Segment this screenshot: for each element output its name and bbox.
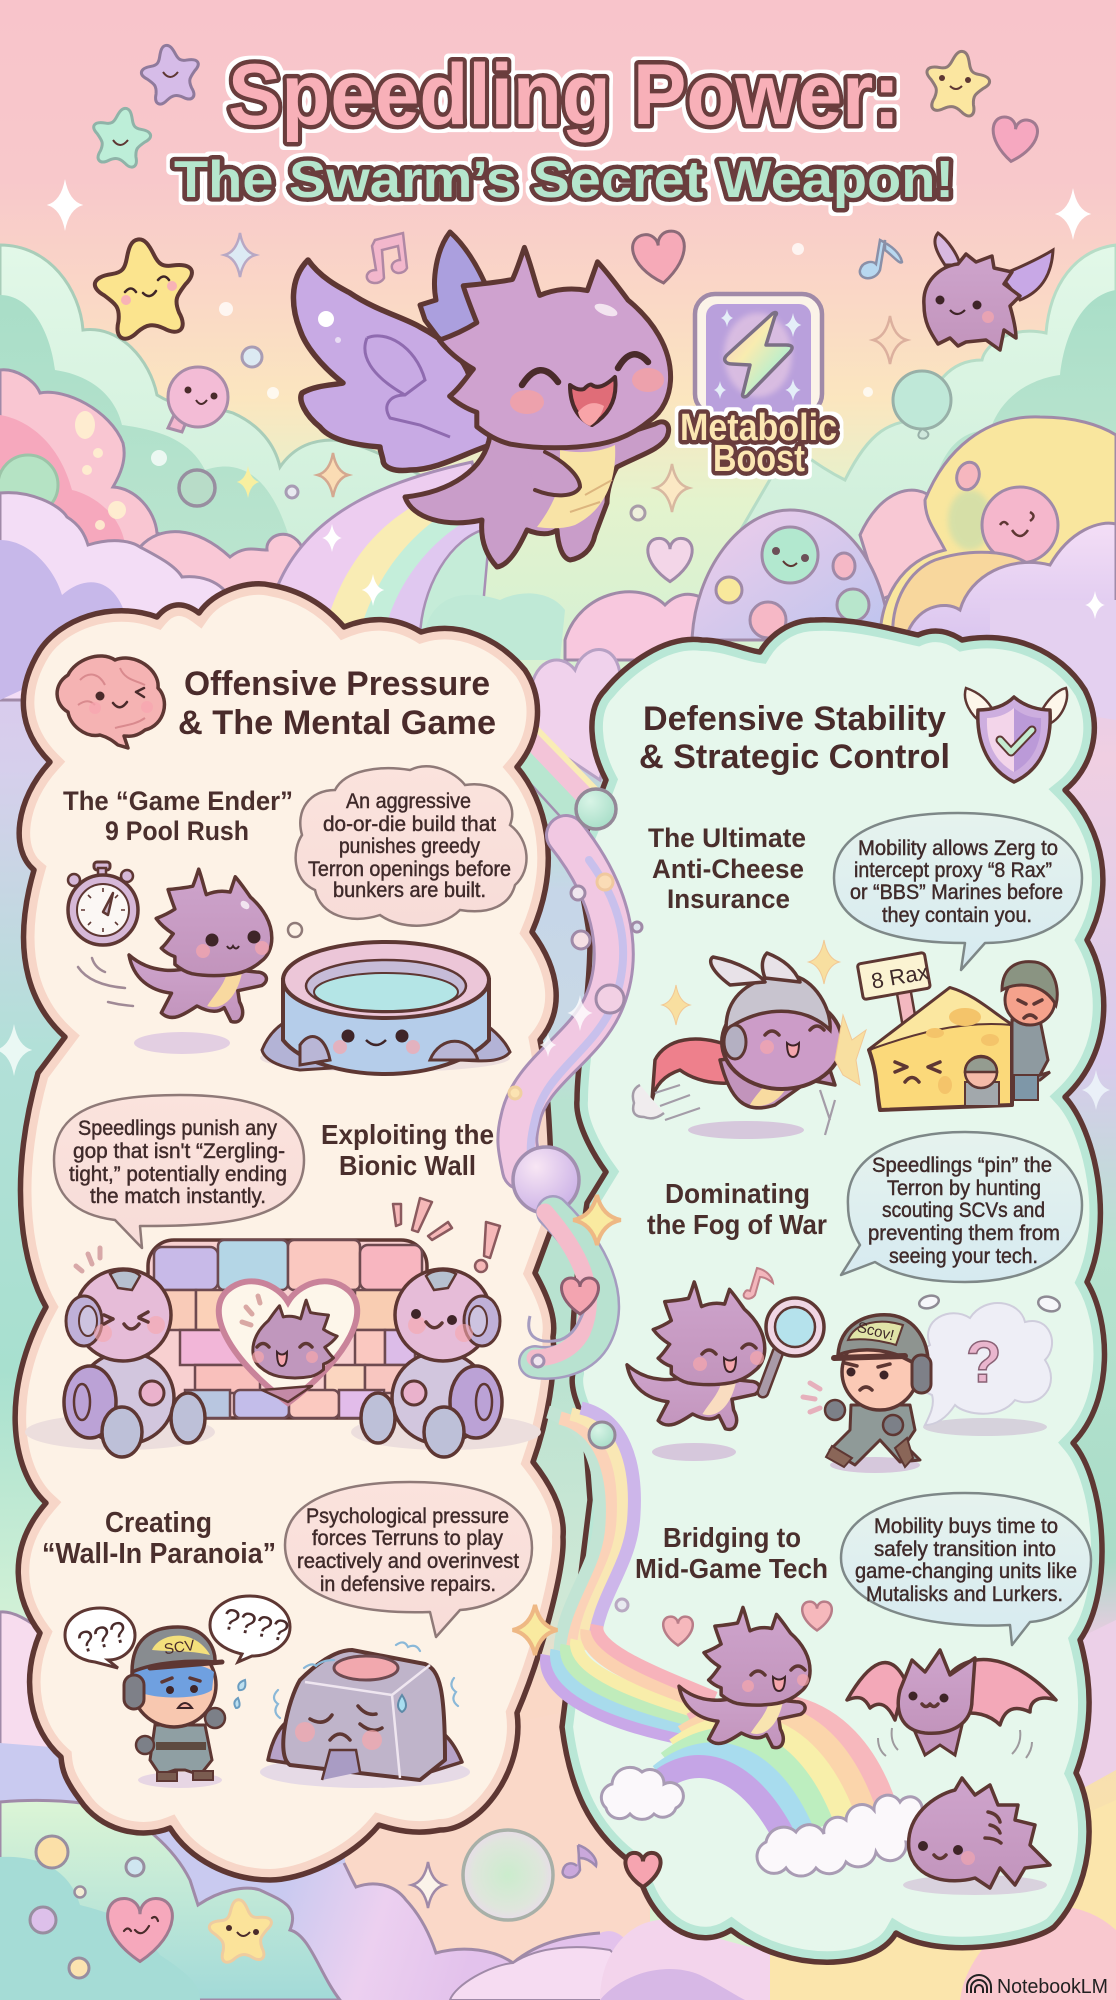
- icon: yellow star on ribbon: [573, 1195, 621, 1245]
- cloud: lavender right: [905, 523, 1116, 660]
- speech bubble: anti-cheese: they contain you.: [882, 904, 1032, 927]
- subheading: anti-cheese: Insurance: [667, 884, 790, 914]
- speech bubble: fog of war: scouting SCVs and: [882, 1199, 1045, 1222]
- cloud: right arch end: [757, 1795, 924, 1876]
- heart opening: [219, 1281, 357, 1403]
- marine robot right: [351, 1269, 541, 1457]
- icon: heart on panel edge: [625, 1853, 661, 1887]
- icon: pink heart top centre: [631, 229, 689, 287]
- heading: offensive pressure: Offensive Pressure: [184, 665, 490, 703]
- head: [439, 247, 671, 448]
- heading: defensive stability: & Strategic Control: [639, 738, 950, 776]
- speech bubble: fog of war: preventing them from: [868, 1222, 1060, 1245]
- speech bubble: anti-cheese: intercept proxy “8 Rax”: [854, 859, 1052, 882]
- subheading: 9 pool rush: The “Game Ender”: [63, 786, 293, 816]
- cloud: yellow bottom right: [770, 1800, 1116, 2000]
- label: metabolic boost: [680, 407, 837, 480]
- belly: [537, 445, 615, 528]
- decorative stars, hearts and sparkles: top: [47, 40, 1091, 582]
- motion lines: hero: [655, 1085, 835, 1135]
- cloud: pink base centre: [565, 592, 715, 660]
- cloud: pink inner: [0, 415, 125, 560]
- panel: offensive pressure: [15, 584, 563, 1880]
- mouth: [570, 377, 616, 425]
- cloud: mint bottom left: [0, 1800, 340, 2000]
- cloud: lavender inner: [0, 540, 130, 700]
- scv worried: [124, 1627, 225, 1788]
- icon: pink heart top right: [989, 116, 1039, 164]
- speedling: winged helmet hero: [652, 953, 842, 1139]
- sparkle right: [1055, 188, 1091, 240]
- subheading: wall-in paranoia: Creating: [105, 1507, 212, 1539]
- dust puff: [633, 1085, 664, 1118]
- background clouds: lower area: [0, 1612, 1116, 2000]
- speech bubble: bionic wall: gop that isn't “Zergling-: [73, 1140, 285, 1163]
- alert marks: [393, 1198, 500, 1272]
- speech bubble: anti-cheese: Mobility allows Zerg to: [858, 837, 1058, 860]
- small orbs on ribbon: [509, 874, 642, 1099]
- icon: mint blob face: [762, 527, 818, 583]
- cloud: pink right bottom: [960, 1905, 1116, 2000]
- title: [174, 47, 954, 209]
- hero speedling with wings: [293, 232, 671, 567]
- icon: big yellow star: [89, 233, 200, 342]
- bunker: [260, 1650, 470, 1788]
- cloud: bottom peach fill: [340, 1700, 660, 2000]
- speech bubble: bionic wall: [54, 1095, 304, 1248]
- fog thought cloud: [913, 1294, 1061, 1436]
- marine robot left: [25, 1269, 215, 1457]
- sign: 8 rax: [857, 952, 931, 1036]
- subheading: wall-in paranoia: “Wall-In Paranoia”: [42, 1538, 276, 1570]
- arm: [525, 450, 580, 495]
- icon: lavender star: [137, 40, 204, 106]
- speedling in heart: [252, 1300, 337, 1402]
- speech bubble: mid-game: game-changing units like: [855, 1560, 1077, 1583]
- cloud: teal right: [930, 290, 1116, 520]
- icon: notebook logo: [967, 1975, 991, 1993]
- speech bubble: paranoia: reactively and overinvest: [297, 1550, 519, 1573]
- spawning pool: [260, 942, 510, 1074]
- background: lower gutters: [0, 600, 1116, 2000]
- cloud: teal left: [0, 295, 300, 640]
- cheese wedge: [869, 988, 1012, 1110]
- panel: defensive stability: [562, 620, 1104, 1962]
- sparkle left: [47, 179, 83, 231]
- blush right: [632, 368, 664, 392]
- thought bubble: 9 pool: Terron openings before: [308, 858, 511, 881]
- ribbon: top band: [510, 718, 606, 822]
- small ring centre: [631, 506, 645, 520]
- thought bubble: 9 pool: An aggressive: [346, 790, 471, 813]
- icon: winged shield: [965, 688, 1067, 782]
- speech bubble: paranoia: forces Terruns to play: [312, 1527, 503, 1550]
- cloud: mint right: [700, 245, 1116, 640]
- orb: top mint: [576, 789, 616, 829]
- cloud: pink-lav bottom right: [600, 1920, 810, 2000]
- scv scowling: Scov!: [855, 1319, 896, 1344]
- brick wall with heart breach: [148, 1240, 427, 1418]
- eyes: [522, 354, 648, 385]
- icon: heart on ribbon: [561, 1278, 599, 1314]
- subheading: anti-cheese: The Ultimate: [648, 823, 806, 853]
- speech bubble: anti-cheese: [834, 813, 1082, 970]
- speech bubble: paranoia: in defensive repairs.: [320, 1573, 496, 1596]
- blush left: [510, 390, 544, 414]
- speech bubble: bionic wall: tight,” potentially ending: [69, 1163, 287, 1186]
- speech bubble: mid-game: [841, 1493, 1091, 1645]
- motion lines: dragon run: [78, 958, 133, 1006]
- subheading: mid-game tech: Bridging to: [663, 1522, 801, 1553]
- wing feather line: [365, 336, 450, 437]
- impact marks in heart: [242, 1296, 260, 1325]
- cloud: orange right: [893, 552, 1030, 640]
- cloud: mint band centre: [423, 593, 565, 660]
- motion marks: scv: [803, 1383, 820, 1412]
- subheading: anti-cheese: Anti-Cheese: [652, 854, 804, 884]
- outline sparkle: [412, 1862, 444, 1908]
- scv scowling: [825, 1315, 931, 1473]
- ring bubble: [242, 347, 262, 367]
- cloud: lavender pink bottom centre: [270, 1863, 700, 2000]
- yellow sparkle: [237, 466, 259, 498]
- note: [563, 1845, 596, 1878]
- sign: 8 rax: 8 Rax: [869, 959, 930, 994]
- sparkle left gutter: [0, 1024, 32, 1076]
- subheading: 9 pool rush: [63, 786, 293, 846]
- icon: stopwatch: [68, 862, 138, 945]
- speech bubble: mid-game: Mutalisks and Lurkers.: [866, 1583, 1063, 1606]
- icon: yellow star top right: [921, 46, 994, 119]
- heading: offensive pressure: [178, 665, 496, 742]
- cloud: lavender right gutter: [1075, 1620, 1116, 1790]
- icon: music note: [744, 1268, 773, 1299]
- speech bubble: fog of war: seeing your tech.: [889, 1245, 1038, 1268]
- icon: blue music note: [860, 240, 902, 278]
- speech bubble: mid-game: Mobility buys time to: [874, 1515, 1058, 1538]
- shine on head: [593, 301, 619, 319]
- small marine in cheese: [965, 1056, 999, 1106]
- motion lines: mutalisk: [878, 1728, 1032, 1758]
- subheading: wall-in paranoia: [42, 1507, 276, 1570]
- shake lines: [274, 1642, 458, 1718]
- brand: NotebookLM: NotebookLM: [997, 1976, 1108, 1998]
- arm outline: [535, 452, 580, 495]
- subheading: fog of war: [647, 1178, 827, 1240]
- speech bubble: mid-game: safely transition into: [874, 1538, 1056, 1561]
- front wing: [293, 260, 497, 471]
- thought bubble: 9 pool: [288, 766, 526, 937]
- icon: small ring: [616, 1599, 628, 1611]
- orb: lower mint: [589, 1422, 615, 1448]
- cloud: pale front bottom: [450, 1947, 660, 2000]
- cloud: pink behind yellow: [860, 490, 950, 600]
- heading: defensive stability: Defensive Stability: [643, 700, 946, 738]
- belly lines: [570, 480, 612, 512]
- body: [405, 422, 669, 567]
- lurker: [903, 1778, 1050, 1895]
- speedling: with magnifier: [627, 1282, 824, 1461]
- impact marks left: [76, 1248, 100, 1271]
- icon: pink music note: [367, 233, 407, 283]
- sparkle right top gutter: [1085, 591, 1105, 619]
- icon: mint star: [88, 103, 155, 169]
- bubble in pink cloud: [0, 455, 58, 515]
- tongue: [578, 403, 604, 426]
- fog thought cloud: ?: [966, 1330, 1001, 1395]
- thought bubble: 9 pool: punishes greedy: [339, 835, 480, 858]
- top rainbow arc: [278, 462, 490, 640]
- peach sparkle: [318, 453, 348, 497]
- heading: offensive pressure: & The Mental Game: [178, 704, 496, 742]
- mint balloon: [893, 371, 951, 439]
- sparkles on rainbow arc: [322, 524, 384, 606]
- sweat drops: [234, 1680, 245, 1708]
- icon: metabolic boost badge: [695, 294, 822, 416]
- sparkles on ribbon: [540, 995, 593, 1057]
- title: The Swarm’s Secret Weapon!: [174, 151, 954, 209]
- cloud: yellow shading: [948, 490, 992, 550]
- small ring: [286, 486, 298, 498]
- green bubble: [179, 470, 215, 506]
- question bubbles: ????: [219, 1603, 292, 1649]
- back wing: [420, 232, 500, 400]
- cloud: lavender inner bottom right: [600, 1969, 745, 2000]
- cloud: gutter lavender behind right panel: [990, 600, 1116, 720]
- icon: pink blob: [168, 367, 228, 432]
- speech bubble: bionic wall: Speedlings punish any: [78, 1117, 277, 1140]
- subheading: fog of war: Dominating: [665, 1178, 810, 1209]
- heading: defensive stability: [639, 700, 950, 776]
- ribbon: rainbow river: [547, 1408, 715, 1740]
- cloud: teal inside bottom left: [0, 1857, 200, 2000]
- question bubbles: [65, 1596, 292, 1668]
- subheading: anti-cheese: [648, 823, 806, 914]
- ribbon: lower pink band: [535, 1212, 603, 1363]
- subheading: fog of war: the Fog of War: [647, 1209, 827, 1240]
- smiling star: [207, 1897, 275, 1964]
- subheading: mid-game tech: [635, 1522, 828, 1584]
- label: metabolic boost: Boost: [713, 438, 805, 480]
- sparkle right gutter: [1082, 1070, 1110, 1110]
- ring small: [532, 1355, 544, 1367]
- thought bubble: 9 pool: do-or-die build that: [323, 813, 496, 836]
- cloud: left arch end: [601, 1767, 683, 1819]
- speech bubble: fog of war: Speedlings “pin” the: [872, 1154, 1052, 1177]
- marine behind cheese: [1002, 962, 1057, 1100]
- subheading: mid-game tech: Mid-Game Tech: [635, 1553, 828, 1584]
- orb: big lavender: [513, 1147, 579, 1213]
- thought bubble: 9 pool: bunkers are built.: [333, 879, 486, 902]
- orbs: [30, 1836, 144, 1978]
- speech bubble: paranoia: [285, 1482, 532, 1637]
- sparkle stars: [662, 940, 866, 1085]
- icon: pink oval: [953, 459, 983, 493]
- speech bubble: anti-cheese: or “BBS” Marines before: [850, 881, 1063, 904]
- dome dots: [716, 553, 869, 638]
- icon: pink blob face: [982, 487, 1058, 563]
- cloud outline: bottom centre: [344, 1863, 600, 1963]
- speedling: on rainbow: [679, 1607, 810, 1748]
- cloud: lavender left: [0, 493, 232, 700]
- speech bubble: paranoia: Psychological pressure: [306, 1505, 509, 1528]
- icons: hearts in mid-game: [663, 1602, 832, 1645]
- rainbow arch: [652, 1704, 885, 1838]
- cloud: bubble dome: [692, 510, 890, 640]
- mutalisk: [847, 1650, 1056, 1755]
- bottom decorations: [30, 1830, 596, 1978]
- icon: yellow star lower: [513, 1605, 557, 1655]
- cloud: yellow right: [880, 417, 1116, 640]
- peach sparkle centre: [655, 464, 689, 512]
- smiling heart: [108, 1898, 172, 1962]
- subheading: bionic wall: Bionic Wall: [339, 1150, 476, 1181]
- sparkle blue: [225, 233, 255, 277]
- speech bubble: bionic wall: the match instantly.: [90, 1185, 266, 1208]
- peach sparkle right: [873, 316, 907, 364]
- icon: brain: [57, 656, 164, 748]
- speedling: running: [129, 869, 272, 1054]
- small flying speedling: [924, 233, 1053, 350]
- white dots: [151, 243, 873, 466]
- subheading: bionic wall: Exploiting the: [321, 1119, 494, 1150]
- title: Speedling Power:: [228, 47, 900, 143]
- speech bubble: fog of war: Terron by hunting: [887, 1177, 1041, 1200]
- dots on pink cloud: [75, 411, 126, 530]
- cloud: pale pink left: [0, 1612, 100, 1760]
- speech bubble: fog of war: [841, 1132, 1082, 1282]
- ribbon: mid band: [517, 835, 623, 1170]
- label: metabolic boost: Metabolic: [680, 407, 837, 449]
- cloud: pink left: [0, 370, 280, 640]
- question bubbles: ???: [74, 1615, 131, 1660]
- cloud: centre gutter heart: [530, 650, 620, 780]
- cloud: periwinkle left: [0, 1743, 345, 2000]
- background clouds: upper area: [0, 245, 1116, 720]
- cloud: mint left: [0, 245, 470, 640]
- big bubble: [463, 1830, 553, 1920]
- wing highlights: [318, 311, 341, 343]
- subheading: bionic wall: [321, 1119, 494, 1181]
- heart outline: [648, 538, 692, 582]
- cloud: pink middle: [130, 532, 302, 640]
- decorative curl: [529, 1308, 585, 1341]
- subheading: 9 pool rush: 9 Pool Rush: [105, 816, 249, 846]
- scv worried: SCV: [163, 1637, 196, 1658]
